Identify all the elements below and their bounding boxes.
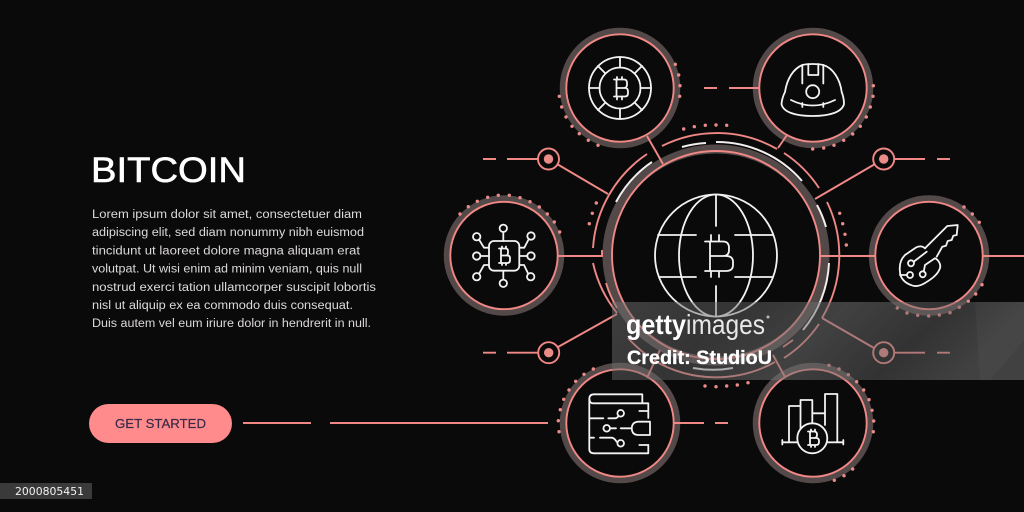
body text: nostrud exerci tation ullamcorper suscipit lobortis	[92, 282, 376, 294]
body text: Duis autem vel eum iriure dolor in hendrerit in null.	[92, 318, 371, 330]
circle: miner helmet	[756, 31, 875, 151]
body text: volutpat. Ut wisi enim ad minim veniam, quis null	[92, 264, 362, 276]
icon: helmet	[782, 64, 844, 116]
icon: wallet	[589, 394, 650, 453]
circle: crypto wallet	[557, 366, 677, 480]
body text: nisl ut aliquip ex ea commodo duis consequat.	[92, 300, 353, 312]
image id label	[0, 483, 92, 499]
get started button	[89, 404, 232, 443]
watermark band	[612, 302, 1024, 380]
icon: coin	[589, 57, 651, 119]
node: bottom right	[873, 342, 894, 363]
node: top right	[873, 148, 894, 170]
watermark text: Credit: StudioU	[627, 347, 772, 369]
watermark text: getty	[626, 309, 686, 340]
body text: Lorem ipsum dolor sit amet, consectetuer diam	[92, 209, 362, 221]
node: top left	[538, 148, 559, 170]
icon: key	[900, 225, 958, 286]
watermark text	[626, 309, 772, 369]
watermark text: images	[686, 309, 765, 340]
central hub rings	[593, 133, 839, 377]
body text: adipiscing elit, sed diam nonummy nibh euismod	[92, 227, 364, 239]
circle: bitcoin coin	[558, 31, 682, 147]
circle: network chip	[447, 194, 561, 312]
node: bottom left	[538, 342, 559, 363]
title: BITCOIN	[91, 151, 246, 190]
connector lines	[243, 88, 1024, 423]
icon: bitcoin globe	[655, 194, 777, 316]
circle: bar chart	[756, 364, 875, 482]
body text: tincidunt ut laoreet dolore magna aliquam erat	[92, 246, 361, 258]
get started button: GET STARTED	[115, 416, 206, 431]
icon: bars with bitcoin	[782, 394, 843, 453]
hub dots	[588, 123, 848, 388]
circle: crypto key	[872, 198, 986, 318]
image id label: 2000805451	[15, 485, 84, 498]
body text	[92, 209, 376, 330]
icon: chip	[473, 225, 535, 287]
